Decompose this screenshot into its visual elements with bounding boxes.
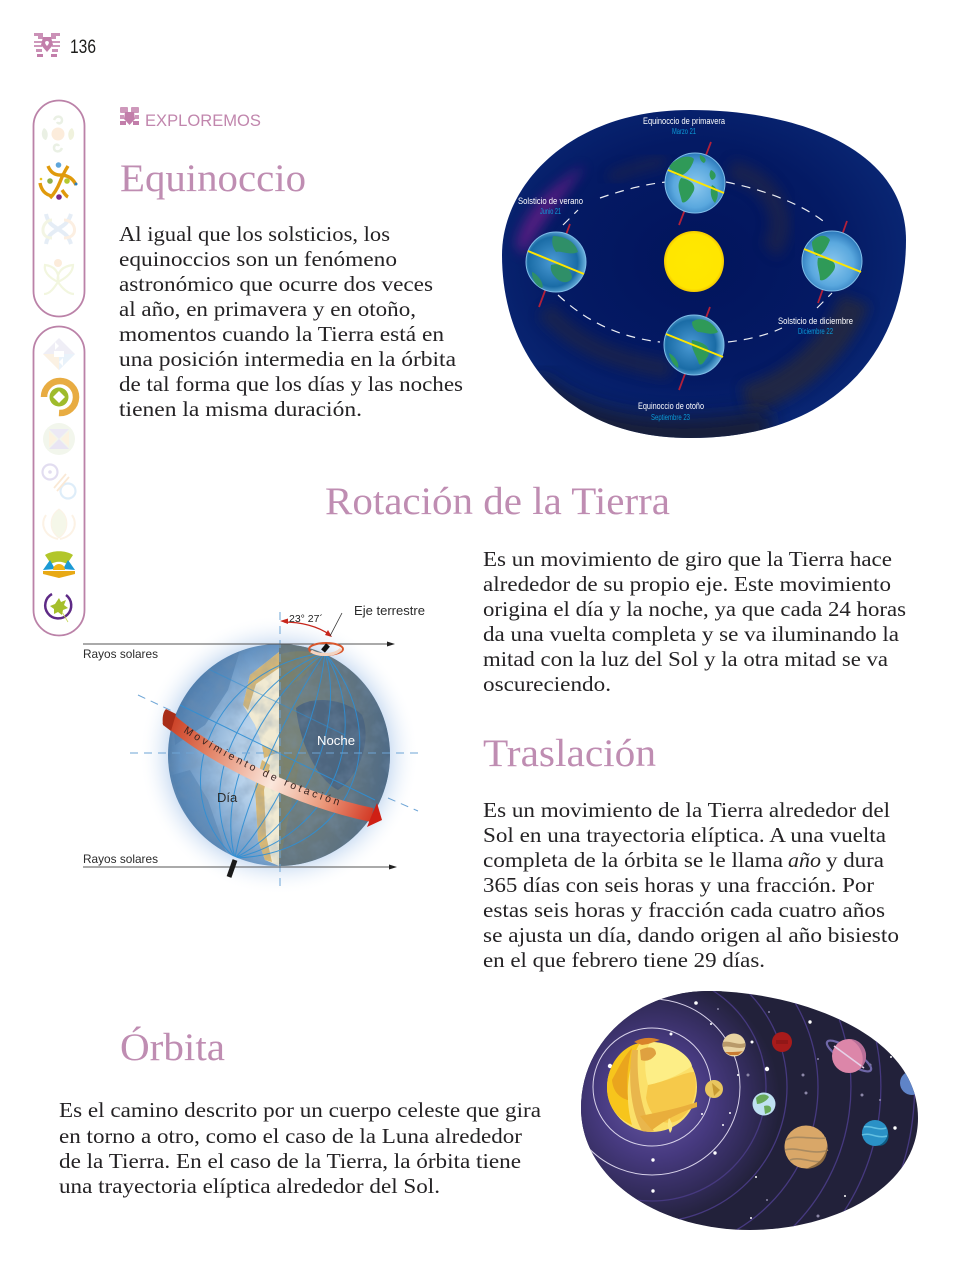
globe: top xyxy=(665,142,725,225)
sun xyxy=(664,231,724,292)
label: Rayos solares top: Rayos solares xyxy=(83,647,158,661)
text block: rotación: alrededor de su propio eje. Este movimiento xyxy=(483,572,891,596)
text block: traslación: Sol en una trayectoria elíptica. A una vuelta xyxy=(483,823,887,847)
label: Equinoccio de primavera: Marzo 21 xyxy=(672,126,696,136)
text block: equinoccio: tienen la misma duración. xyxy=(119,397,362,421)
label: Solsticio de diciembre: Diciembre 22 xyxy=(798,326,833,336)
text block: equinoccio: momentos cuando la Tierra está en xyxy=(119,322,445,346)
text block: rotación: origina el día y la noche, ya que cada 24 horas xyxy=(483,597,906,621)
icon: orange ring with green diamond xyxy=(44,381,76,413)
text block: traslación: y dura xyxy=(826,848,885,872)
arc 23 degrees: 23° 27´ xyxy=(289,613,323,625)
text block: traslación: año xyxy=(788,848,821,872)
panel: equinox diagram xyxy=(502,110,906,438)
label: Día: Día xyxy=(217,790,238,805)
panel: sidebar top pill xyxy=(34,100,84,316)
label: Rayos solares bottom: Rayos solares xyxy=(83,852,158,866)
planet: Earth xyxy=(752,1092,776,1116)
text block: rotación: da una vuelta completa y se va iluminando la xyxy=(483,622,900,646)
globe: bottom xyxy=(664,307,724,390)
panel: sidebar bottom pill xyxy=(34,326,84,636)
heading: Rotación de la Tierra: Rotación de la Tierra xyxy=(325,480,670,523)
text block: rotación xyxy=(483,547,906,696)
text block: traslación: se ajusta un día, dando origen al año bisiesto xyxy=(483,923,899,947)
text block: traslación: Es un movimiento de la Tierra alrededor del xyxy=(483,798,890,822)
icon: faded lotus xyxy=(43,509,75,539)
page number: 136 xyxy=(70,36,96,58)
text block: traslación: 365 días con seis horas y una fracción. Por xyxy=(483,873,874,897)
page logo emblem xyxy=(34,33,60,57)
text block: traslación: en el que febrero tiene 29 días. xyxy=(483,948,765,972)
icon: faded percent rings xyxy=(42,464,76,498)
label: Noche: Noche xyxy=(317,733,355,748)
text block: equinoccio: al año, en primavera y en otoño, xyxy=(119,297,416,321)
meridians xyxy=(180,653,375,858)
icon: faded diamond xyxy=(43,338,75,370)
label: Equinoccio de primavera: Equinoccio de primavera xyxy=(643,116,726,127)
text block: equinoccio: astronómico que ocurre dos veces xyxy=(119,272,433,296)
text block: órbita xyxy=(59,1098,542,1198)
text block: rotación: Es un movimiento de giro que la Tierra hace xyxy=(483,547,892,571)
text block: equinoccio: de tal forma que los días y las noches xyxy=(119,372,463,396)
sun illustration xyxy=(607,1038,697,1133)
planet: Saturn xyxy=(823,1036,875,1076)
icon: purple circle with green splash xyxy=(45,594,71,622)
heading: Equinoccio: Equinoccio xyxy=(120,157,306,200)
planet: Mars xyxy=(772,1032,792,1052)
dashed axes xyxy=(130,612,421,890)
label: Solsticio de diciembre: Solsticio de diciembre xyxy=(778,316,853,327)
text block: equinoccio: Al igual que los solsticios, los xyxy=(119,222,390,246)
globe xyxy=(168,640,399,870)
label: Equinoccio de primavera xyxy=(643,116,726,136)
text block: rotación: mitad con la luz del Sol y la otra mitad se va xyxy=(483,647,889,671)
globe: left xyxy=(526,224,586,307)
text block: traslación: estas seis horas y fracción cada cuatro años xyxy=(483,898,885,922)
label: Equinoccio de otoño: Equinoccio de otoño xyxy=(638,401,704,412)
label: Equinoccio de otoño xyxy=(638,401,704,422)
label: Eje terrestre xyxy=(330,604,425,636)
icon: small emblem xyxy=(120,107,139,125)
arc 23 degrees xyxy=(280,613,332,637)
stars xyxy=(608,1001,897,1219)
planet: Uranus xyxy=(862,1120,889,1146)
diagram: Earth rotation xyxy=(83,604,425,886)
icon: green blue orange fan xyxy=(43,551,75,578)
text block: equinoccio: una posición intermedia en la órbita xyxy=(119,347,457,371)
planet: Venus xyxy=(722,1034,746,1056)
orbits xyxy=(637,991,915,1230)
icon: faded sun and swirls xyxy=(42,117,74,151)
label: Solsticio de verano: Junio 21 xyxy=(540,206,561,216)
axis bottom xyxy=(229,860,235,877)
planet: Mercury xyxy=(705,1080,723,1098)
label: Solsticio de verano xyxy=(518,196,583,216)
label: Equinoccio de otoño: Septiembre 23 xyxy=(651,412,690,422)
text block: equinoccio: equinoccios son un fenómeno xyxy=(119,247,397,271)
rotation ribbon arrow xyxy=(162,709,382,827)
icon: faded cross circle xyxy=(43,423,75,455)
heading: Órbita: Órbita xyxy=(120,1025,225,1069)
globe: right xyxy=(802,221,862,303)
text block: traslación xyxy=(483,798,899,972)
rotation ribbon arrow: Movimiento de rotación xyxy=(184,726,339,806)
label: Solsticio de diciembre xyxy=(778,316,853,336)
text block: traslación: completa de la órbita se le llama xyxy=(483,848,784,872)
planet: Neptune xyxy=(900,1073,915,1095)
icon: active orange knot xyxy=(40,162,78,200)
panel: solar system xyxy=(581,991,918,1230)
label: Solsticio de verano: Solsticio de verano xyxy=(518,196,583,207)
heading: Traslación: Traslación xyxy=(483,732,656,775)
icon: faded plant xyxy=(44,259,74,294)
text block: órbita: de la Tierra. En el caso de la Tierra, la órbita tiene xyxy=(59,1149,521,1173)
label: Eje terrestre: Eje terrestre xyxy=(354,604,425,618)
section label: Exploremos xyxy=(120,107,261,130)
text block: órbita: en torno a otro, como el caso de la Luna alrededor xyxy=(59,1124,522,1148)
rayos solares lines xyxy=(83,643,388,645)
text block: rotación: oscureciendo. xyxy=(483,672,611,696)
text block: órbita: una trayectoria elíptica alrededor del Sol. xyxy=(59,1174,440,1198)
section label: Exploremos: EXPLOREMOS xyxy=(145,112,261,130)
text block: órbita: Es el camino descrito por un cuerpo celeste que gira xyxy=(59,1098,542,1122)
planet: Jupiter xyxy=(784,1126,828,1169)
axis top with rotation xyxy=(309,643,343,655)
orbit dashed line xyxy=(558,182,832,342)
text block: equinoccio xyxy=(119,222,463,421)
icon: faded interlocked arcs xyxy=(43,214,75,244)
